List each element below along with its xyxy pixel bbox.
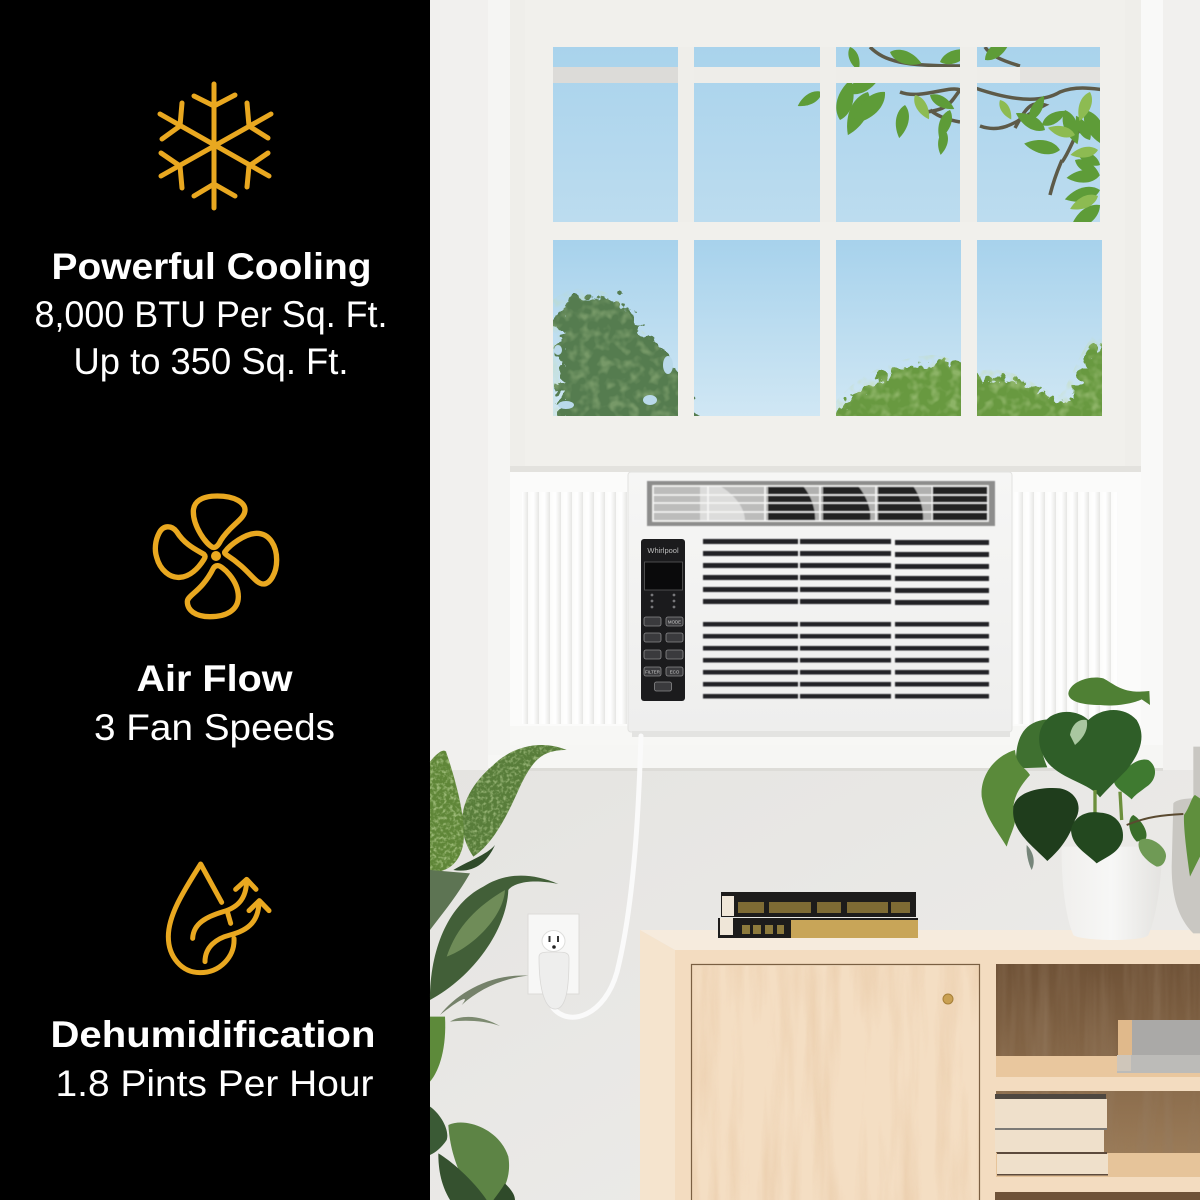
door knob — [943, 994, 953, 1004]
tree: lower centre dome — [836, 328, 1102, 416]
white pot — [1062, 847, 1162, 940]
leaf highlight — [1070, 720, 1087, 745]
heading: air flow: Air Flow — [136, 658, 293, 699]
tree: lower left — [553, 288, 690, 420]
leaf: bottom dark — [430, 1107, 447, 1155]
shelf upper front — [996, 1077, 1200, 1091]
ac louvers lower — [703, 622, 989, 698]
left black panel — [0, 0, 430, 1200]
leaf: upper left texture — [430, 751, 464, 872]
leaf: bottom front — [438, 1153, 487, 1200]
leaf: top large texture — [462, 745, 567, 857]
button labels: ECO — [670, 670, 680, 674]
status indicators — [651, 594, 675, 608]
leaf: left large — [982, 750, 1030, 847]
power cord — [553, 736, 641, 1017]
shelf bottom dark — [995, 1192, 1200, 1200]
ac body — [628, 472, 1012, 732]
icon: fan — [155, 496, 277, 617]
shelf lower front — [995, 1177, 1200, 1192]
text: pints per hour: 1.8 Pints Per Hour — [56, 1063, 374, 1104]
window mullion with upper bar — [553, 47, 1100, 222]
text: coverage area: Up to 350 Sq. Ft. — [74, 341, 348, 382]
leaf: small dark — [453, 845, 495, 871]
room photo scene — [430, 0, 1200, 1200]
icon: snowflake — [160, 84, 271, 208]
leaf: small right — [1129, 815, 1147, 842]
grey books on upper shelf — [1117, 1020, 1200, 1073]
button labels: MODE — [668, 620, 681, 624]
icon: water drop with arrows — [168, 864, 269, 973]
plant stems — [1095, 790, 1122, 820]
display window — [644, 562, 682, 590]
leaf: bottom large — [448, 1123, 509, 1200]
window panes with sky — [553, 47, 1102, 416]
door wood grain — [692, 966, 979, 1200]
leaf: top — [1068, 677, 1150, 705]
side accordion panels — [510, 472, 1141, 726]
cabinet top surface — [640, 930, 1200, 950]
door gap lines — [692, 964, 980, 1200]
books on cabinet top — [718, 892, 918, 938]
leaf: upper left — [430, 751, 464, 872]
window frame — [488, 0, 1163, 771]
leaf: top large — [462, 745, 567, 857]
button labels: FILTER — [645, 670, 660, 674]
cabinet front frame — [675, 950, 1200, 1200]
wall — [430, 0, 1200, 1200]
leaf: bottom right corner — [493, 1183, 515, 1200]
shelf interior — [996, 964, 1200, 1153]
cabinet side — [640, 930, 675, 1200]
leaf: lower left — [430, 1017, 445, 1082]
stacked books on lower shelf — [995, 1094, 1108, 1176]
ac top vent — [647, 481, 995, 526]
leaf: far right — [1184, 795, 1200, 877]
shelf interior grain — [1002, 964, 1190, 1056]
feature: powerful cooling — [34, 84, 388, 382]
text: fan speeds: 3 Fan Speeds — [94, 707, 335, 748]
ac louvers upper — [703, 539, 989, 605]
tree: top right branches and leaves — [798, 47, 1100, 222]
shelf lower surface — [996, 1153, 1200, 1177]
leaf: muted middle — [430, 870, 470, 930]
trailing stem — [1127, 814, 1183, 825]
right plant in pot — [982, 677, 1200, 940]
heading: powerful cooling: Powerful Cooling — [52, 246, 372, 287]
feature: air flow — [94, 496, 335, 748]
leaf: thin lower — [450, 1017, 500, 1026]
leaf: right — [1114, 759, 1155, 799]
leaf: centre dark — [1013, 788, 1079, 861]
leaf: bottom centre — [1071, 812, 1123, 863]
leaf: main heart — [1039, 710, 1141, 797]
trees seen through window — [553, 34, 1113, 420]
ac bottom edge — [632, 731, 1010, 737]
left plant — [430, 745, 567, 1200]
leaf: small low — [1139, 839, 1166, 867]
leaf: large middle — [430, 876, 558, 1000]
button labels — [645, 620, 681, 674]
leaf: middle highlight — [447, 890, 505, 957]
heading: dehumidification: Dehumidification — [50, 1014, 376, 1055]
air conditioner unit — [628, 472, 1012, 737]
shelf upper surface — [996, 1056, 1200, 1077]
door — [692, 965, 979, 1200]
leaf: small behind — [1027, 845, 1034, 870]
brand logo: Whirlpool — [647, 546, 679, 555]
leaf: back left — [1016, 719, 1047, 768]
control buttons — [644, 617, 683, 691]
text: btu rating: 8,000 BTU Per Sq. Ft. — [34, 294, 388, 335]
wall outlet and plug — [528, 914, 579, 1009]
ac control panel — [641, 539, 685, 701]
cabinet — [640, 892, 1200, 1200]
feature: dehumidification — [50, 864, 376, 1104]
leaf: thin — [440, 975, 528, 1015]
grey vase — [1172, 747, 1200, 933]
